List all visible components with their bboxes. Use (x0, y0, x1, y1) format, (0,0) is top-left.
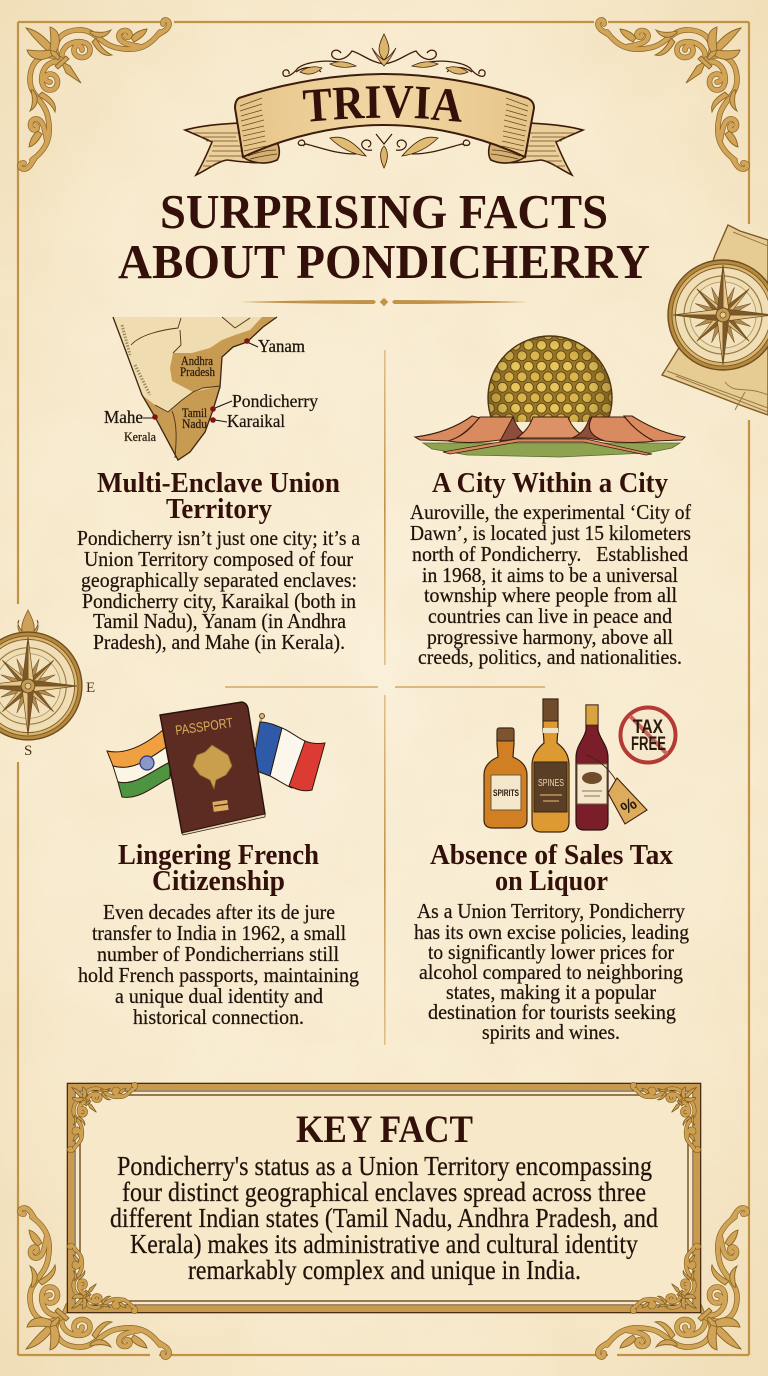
tax free badge: FREE (631, 734, 666, 755)
matrimandir golden sphere illustration (415, 336, 685, 460)
body text: progressive harmony, above all (427, 625, 673, 649)
left ribbon tail (185, 120, 279, 175)
sphere (487, 335, 613, 422)
french flag (255, 716, 262, 745)
indian flag (107, 730, 170, 797)
heading: Territory (166, 494, 272, 525)
bottle: wine (576, 705, 608, 830)
body text: As a Union Territory, Pondicherry (417, 899, 685, 923)
body text: geographically separated enclaves: (81, 568, 357, 592)
heading: Citizenship (152, 866, 285, 897)
body text: Pradesh), and Mahe (in Kerala). (93, 630, 345, 654)
liquor bottles illustration (484, 699, 676, 832)
right ribbon tail (489, 120, 583, 175)
passport book (160, 702, 265, 833)
bottle: spirits: SPIRITS (493, 788, 519, 798)
main title (118, 184, 650, 289)
body text: has its own excise policies, leading (414, 920, 689, 944)
key fact body (110, 1151, 658, 1285)
body text: alcohol compared to neighboring (419, 960, 683, 984)
map of south india enclaves: Kerala (124, 429, 156, 444)
map of south india enclaves: Karaikal (227, 411, 285, 431)
filigree below banner (298, 134, 470, 168)
key fact body: remarkably complex and unique in India. (188, 1255, 581, 1285)
tax free badge: TAX (633, 717, 663, 738)
key fact body: Pondicherry's status as a Union Territory encompassing (117, 1151, 652, 1181)
body text: north of Pondicherry. Established (412, 542, 688, 566)
body text: states, making it a popular (446, 980, 656, 1004)
panel: multi-enclave union territory (77, 317, 361, 654)
title divider (240, 298, 528, 306)
banner: trivia (185, 34, 583, 175)
body text: Tamil Nadu), Yanam (in Andhra (93, 609, 347, 633)
body text (414, 899, 689, 1044)
body text: Dawn’, is located just 15 kilometers (410, 521, 691, 545)
body text (410, 500, 691, 669)
heading: Multi-Enclave Union (97, 468, 340, 499)
body text: Union Territory composed of four (84, 547, 353, 571)
compass rose (668, 260, 768, 370)
petals (415, 416, 480, 441)
heading: on Liquor (495, 866, 608, 897)
map of south india enclaves (104, 317, 318, 460)
filigree above banner (283, 34, 485, 76)
key fact frame (68, 1084, 700, 1312)
compass, left side: S (24, 743, 32, 759)
heading (97, 468, 340, 525)
ground (423, 443, 680, 457)
body text: creeds, politics, and nationalities. (418, 645, 682, 669)
banner title: TRIVIA (301, 74, 464, 132)
body text: transfer to India in 1962, a small (92, 921, 346, 945)
main title: ABOUT PONDICHERRY (118, 234, 650, 289)
bottle: spines (532, 699, 569, 832)
compass and old map, right side (662, 225, 768, 415)
body text: destination for tourists seeking (428, 1000, 676, 1024)
body text: township where people from all (424, 583, 677, 607)
body text: in 1968, it aims to be a universal (422, 563, 678, 587)
heading (430, 840, 674, 897)
ribbon hatching (240, 98, 528, 151)
body text: hold French passports, maintaining (78, 963, 359, 987)
heading (118, 840, 319, 897)
body text: countries can live in peace and (428, 604, 672, 628)
key fact heading: KEY FACT (296, 1107, 473, 1151)
old map (662, 225, 768, 415)
body text: historical connection. (133, 1005, 304, 1029)
body text: Even decades after its de jure (103, 900, 335, 924)
compass, left side (0, 610, 95, 759)
passport label: PASSPORT (174, 715, 234, 738)
panel: key fact (68, 1084, 700, 1312)
body text: to significantly lower prices for (428, 940, 674, 964)
body text: number of Pondicherrians still (97, 942, 339, 966)
heading: Lingering French (118, 840, 319, 871)
map of south india enclaves: Yanam (258, 336, 305, 356)
panel: a city within a city (410, 336, 691, 669)
heading: Absence of Sales Tax (430, 840, 674, 871)
price tag (586, 755, 647, 824)
panel: absence of sales tax on liquor (414, 699, 689, 1044)
bottle: spirits (484, 728, 527, 828)
body text: spirits and wines. (482, 1020, 620, 1044)
body text (78, 900, 359, 1029)
map of south india enclaves: Nadu (182, 416, 207, 431)
passport emblem (193, 745, 232, 789)
price tag: % (617, 794, 640, 818)
map of south india enclaves: Andhra (181, 353, 213, 368)
compass, left side: E (86, 680, 95, 696)
key fact body: Kerala) makes its administrative and cultural identity (130, 1229, 638, 1259)
panel: lingering french citizenship (78, 702, 359, 1029)
map of south india enclaves: Pradesh (180, 364, 215, 379)
map of south india enclaves: Tamil (182, 405, 207, 420)
body text: Pondicherry isn’t just one city; it’s a (77, 526, 361, 550)
bottle: spines: SPINES (538, 778, 564, 789)
key fact body: four distinct geographical enclaves spread across three (122, 1177, 646, 1207)
tax free badge (620, 708, 676, 762)
main title: SURPRISING FACTS (160, 184, 608, 239)
main ribbon band (235, 74, 534, 157)
body text: Auroville, the experimental ‘City of (410, 500, 691, 524)
map of south india enclaves: Mahe (104, 407, 143, 427)
heading: A City Within a City (432, 468, 668, 499)
body text (77, 526, 361, 654)
passport and flags illustration (107, 702, 325, 835)
map of south india enclaves: Pondicherry (232, 391, 318, 411)
body text: a unique dual identity and (115, 984, 323, 1008)
section dividers (225, 350, 545, 1045)
body text: Pondicherry city, Karaikal (both in (82, 589, 356, 613)
key fact body: different Indian states (Tamil Nadu, Andhra Pradesh, and (110, 1203, 658, 1233)
